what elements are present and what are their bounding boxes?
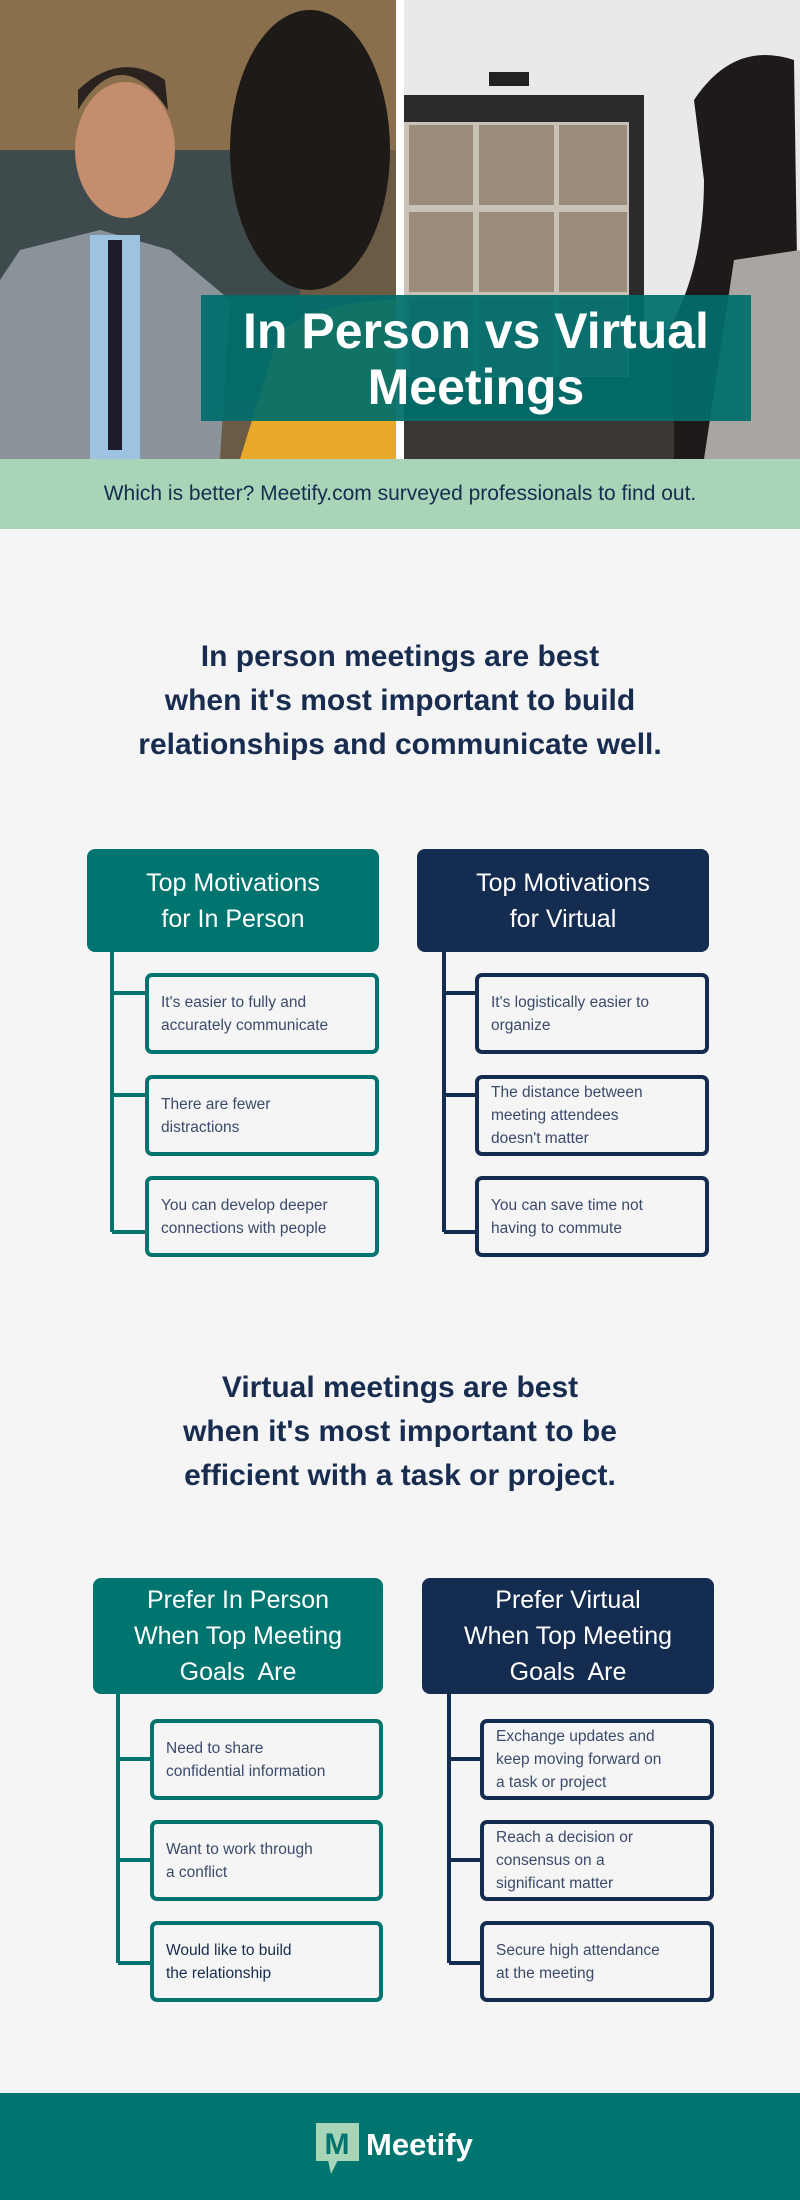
item: You can save time not [491, 1196, 643, 1214]
item: Want to work through [166, 1840, 313, 1858]
item: significant matter [496, 1875, 613, 1892]
header [417, 849, 709, 952]
header [422, 1578, 714, 1694]
heading 2 [183, 1371, 617, 1492]
header: When Top Meeting [464, 1622, 672, 1650]
header: Goals Are [180, 1658, 296, 1686]
item [150, 1820, 383, 1901]
panel: prefer virtual [422, 1578, 714, 2002]
title box: Meetings [368, 359, 584, 415]
item: The distance between [491, 1084, 643, 1101]
item: organize [491, 1016, 550, 1034]
icon: speech bubble M: M [324, 2128, 350, 2161]
header: When Top Meeting [134, 1622, 342, 1650]
footer [0, 2093, 800, 2200]
logo [316, 2123, 473, 2174]
header: Top Motivations [146, 868, 320, 896]
photo: in person [0, 0, 396, 459]
header: Prefer In Person [147, 1586, 329, 1614]
panel: in person motivations [87, 849, 379, 1257]
item: Would like to build [166, 1942, 292, 1958]
header: Top Motivations [476, 868, 650, 896]
item [480, 1921, 714, 2002]
item [480, 1820, 714, 1901]
subtitle band [0, 459, 800, 529]
photo: virtual [404, 0, 800, 459]
title box: In Person vs Virtual [243, 303, 709, 359]
item: Secure high attendance [496, 1942, 660, 1958]
item: a task or project [496, 1774, 606, 1791]
header [87, 849, 379, 952]
header [93, 1578, 383, 1694]
item: doesn't matter [491, 1130, 589, 1147]
header: for In Person [161, 904, 305, 932]
item: consensus on a [496, 1852, 605, 1869]
item: You can develop deeper [161, 1196, 328, 1214]
item [150, 1719, 383, 1800]
hero photos [0, 0, 800, 459]
item: a conflict [166, 1864, 227, 1880]
panel: prefer in person [93, 1578, 383, 2002]
item [145, 1075, 379, 1156]
heading 2: Virtual meetings are best [222, 1371, 578, 1404]
brand name: Meetify [366, 2127, 473, 2162]
header: for Virtual [510, 904, 616, 932]
item: distractions [161, 1118, 239, 1136]
item [475, 1075, 709, 1156]
heading 2: efficient with a task or project. [184, 1459, 616, 1492]
item [150, 1921, 383, 2002]
heading 1 [138, 640, 662, 761]
subtitle band: Which is better? Meetify.com surveyed professionals to find out. [104, 482, 696, 505]
header: Goals Are [510, 1658, 626, 1686]
item [475, 973, 709, 1054]
item: Reach a decision or [496, 1829, 633, 1846]
heading 1: when it's most important to build [165, 684, 635, 717]
heading 1: In person meetings are best [201, 640, 599, 673]
heading 1: relationships and communicate well. [138, 728, 662, 761]
item: confidential information [166, 1762, 325, 1780]
header: Prefer Virtual [495, 1586, 641, 1614]
item: Need to share [166, 1740, 263, 1756]
item: It's logistically easier to [491, 994, 649, 1010]
item: the relationship [166, 1964, 271, 1982]
item: connections with people [161, 1220, 326, 1236]
item: There are fewer [161, 1096, 270, 1112]
item [480, 1719, 714, 1800]
item: keep moving forward on [496, 1751, 661, 1768]
panel: virtual motivations [417, 849, 709, 1257]
item: meeting attendees [491, 1107, 619, 1124]
icon: speech bubble M [316, 2123, 359, 2174]
item: Exchange updates and [496, 1728, 655, 1745]
title box [201, 295, 751, 421]
item [475, 1176, 709, 1257]
heading 2: when it's most important to be [183, 1415, 617, 1448]
item: It's easier to fully and [161, 994, 306, 1010]
item [145, 973, 379, 1054]
item: at the meeting [496, 1964, 594, 1982]
item: accurately communicate [161, 1016, 328, 1034]
item: having to commute [491, 1220, 622, 1236]
item [145, 1176, 379, 1257]
